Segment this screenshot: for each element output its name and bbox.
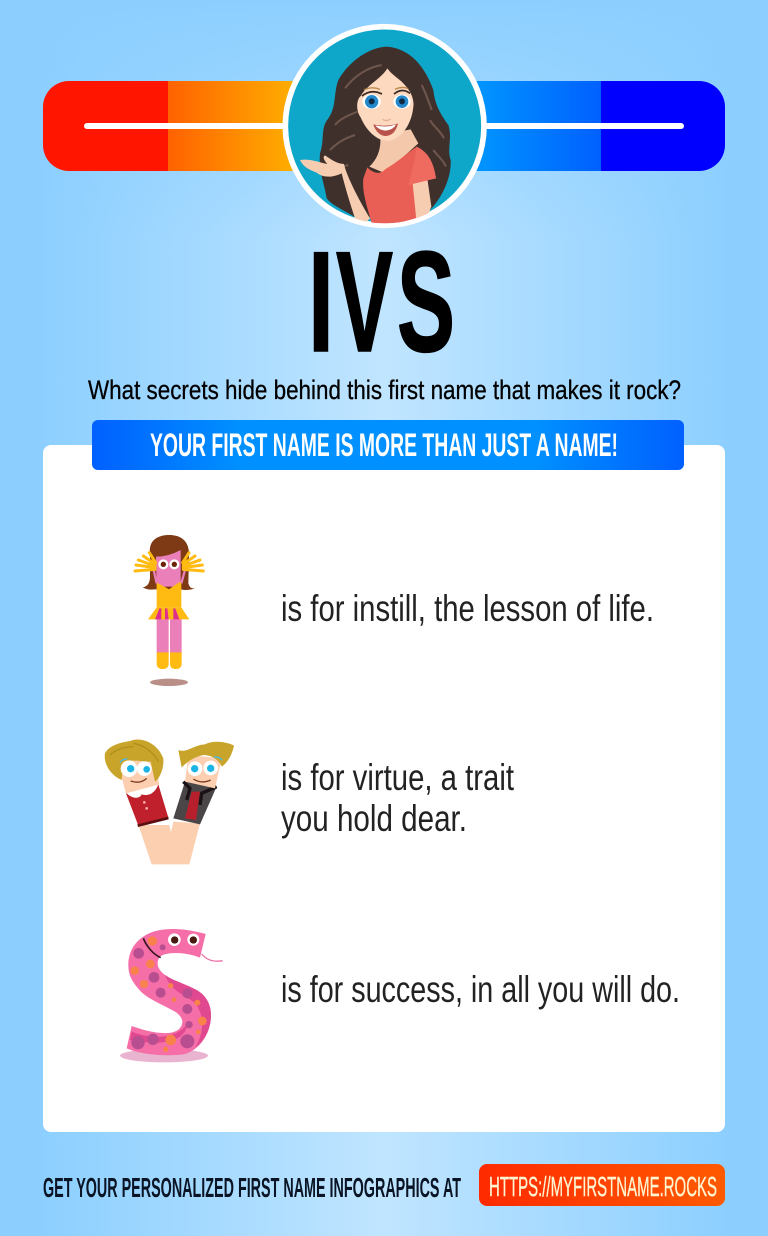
title: V	[336, 223, 393, 382]
icon: letter S snake	[120, 929, 223, 1062]
banner	[92, 420, 684, 470]
left arm and hand	[300, 155, 370, 223]
icon: letter I cheerleader	[135, 535, 203, 686]
mouth	[373, 123, 398, 136]
neck and chest	[369, 129, 418, 173]
nose	[382, 119, 391, 121]
text: letter V	[281, 757, 515, 839]
title	[308, 223, 455, 382]
face	[357, 68, 414, 141]
icon: letter V finger puppets	[105, 740, 234, 864]
right arm	[412, 180, 432, 218]
title: I	[308, 223, 334, 382]
avatar: woman in circle	[285, 27, 484, 225]
eyes	[362, 94, 381, 109]
text: letter V: you hold dear.	[281, 798, 467, 839]
title: S	[397, 223, 455, 382]
shirt	[363, 147, 436, 223]
hair	[320, 47, 451, 218]
white panel	[43, 445, 725, 1132]
text: letter I: is for instill, the lesson of life.	[281, 588, 654, 629]
text: letter V: is for virtue, a trait	[281, 757, 515, 798]
header colour bar	[43, 81, 725, 171]
footer url button	[479, 1164, 725, 1206]
